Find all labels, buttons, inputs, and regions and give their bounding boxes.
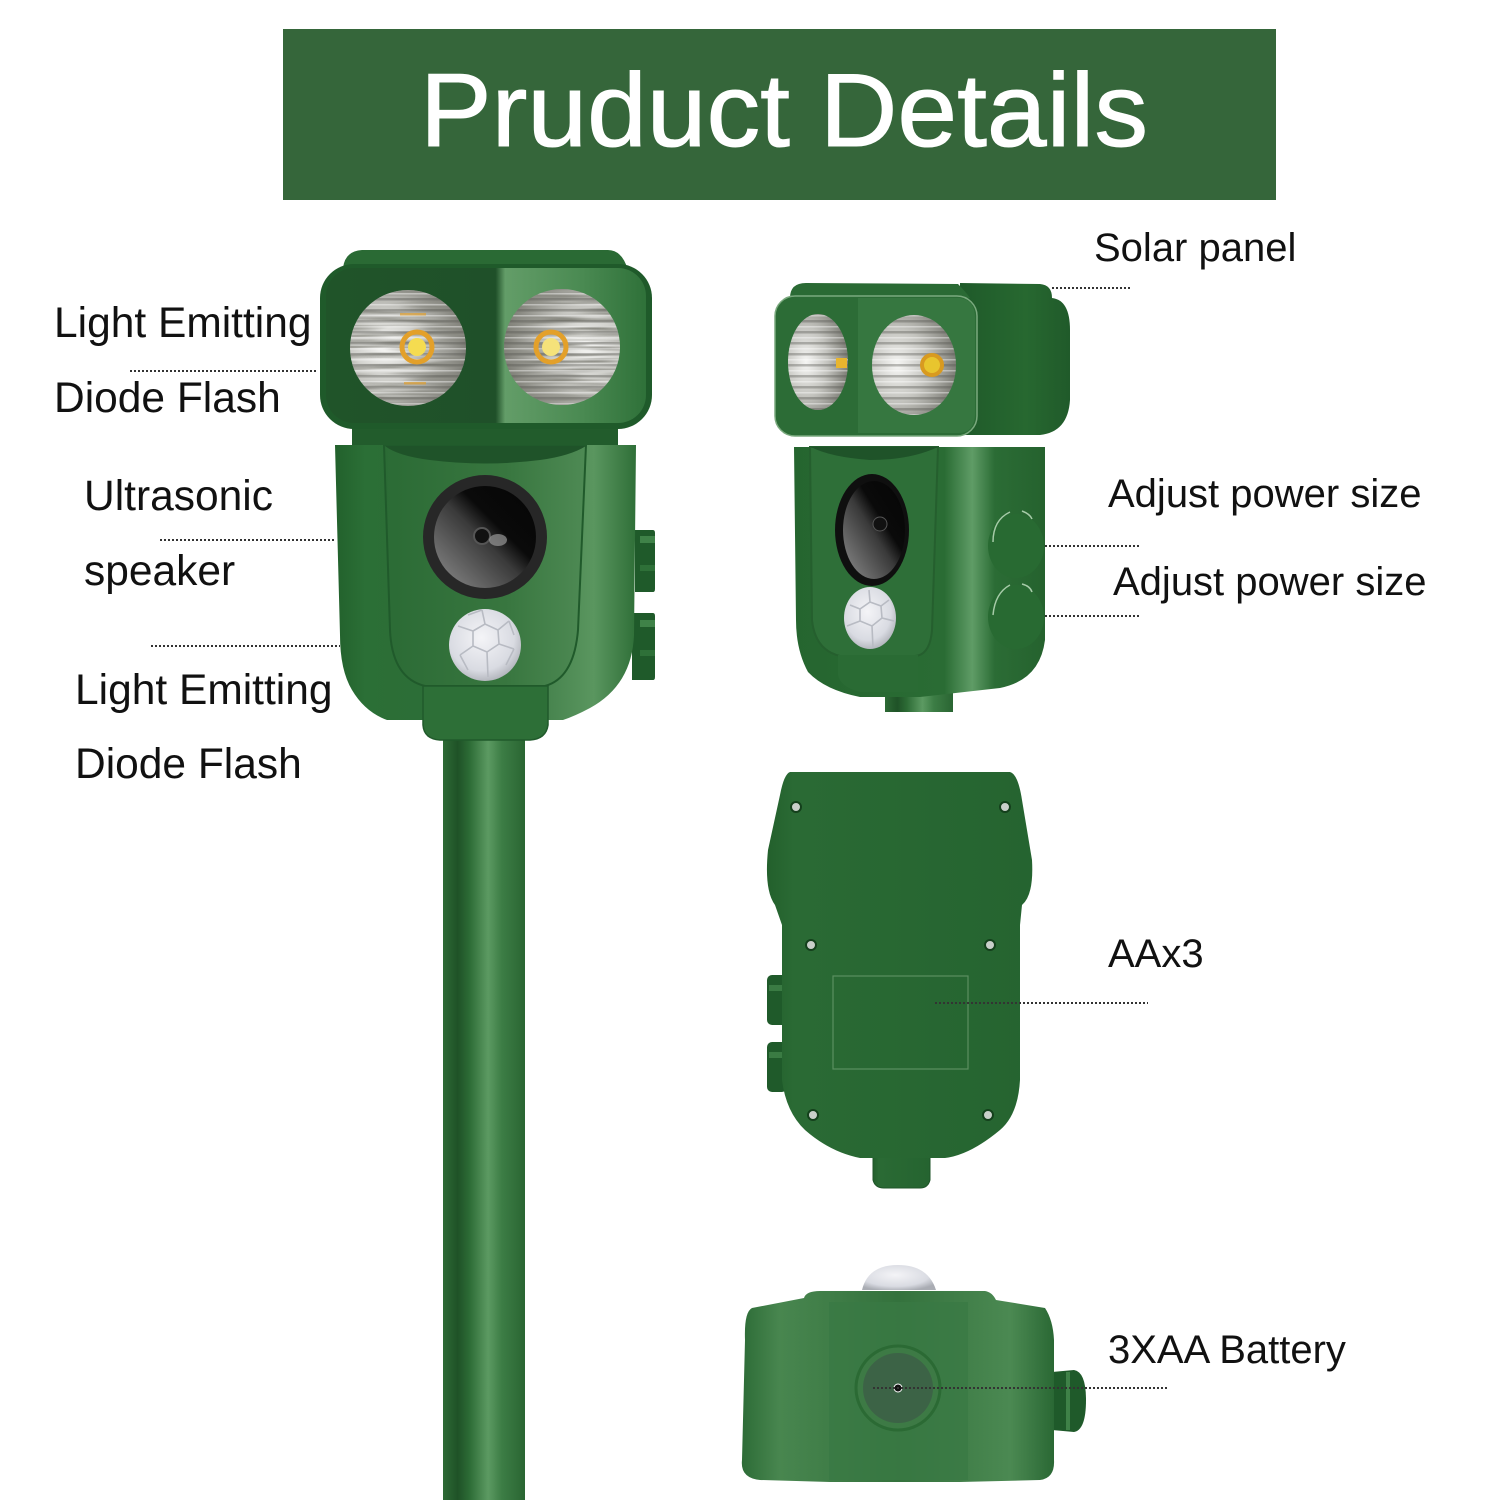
angled lens right (872, 315, 956, 415)
bottom center column (829, 1302, 968, 1480)
label: LED flash lower: Light Emitting (75, 667, 332, 714)
screws (791, 802, 1010, 1120)
angled knobs (988, 511, 1044, 649)
back housing (767, 772, 1032, 1158)
angled PIR sensor (844, 587, 896, 649)
label: LED flash top: Light Emitting (54, 300, 312, 347)
ultrasonic speaker (423, 475, 547, 599)
label: adjust power size 2: Adjust power size (1113, 560, 1426, 604)
hinge (352, 425, 618, 445)
LED lens left (350, 290, 466, 406)
label: ultrasonic speaker: speaker (84, 548, 235, 595)
PIR motion sensor (449, 609, 521, 681)
angled head side (960, 283, 1070, 435)
angled tab (838, 655, 918, 692)
title: Pruduct Details (420, 53, 1148, 169)
angled speaker (835, 474, 909, 586)
lamp head front (326, 268, 646, 423)
product: bottom view (742, 1265, 1086, 1482)
label: ultrasonic speaker (84, 473, 273, 595)
angled head front (775, 296, 977, 436)
label: 3XAA battery: 3XAA Battery (1108, 1328, 1346, 1372)
bottom housing (742, 1291, 1054, 1482)
battery cover outline (833, 976, 968, 1069)
angled front panel (810, 447, 938, 656)
title banner (283, 29, 1276, 200)
lamp head (320, 264, 652, 429)
product: angled view (775, 283, 1070, 712)
battery port (856, 1346, 940, 1430)
back stub (873, 1150, 930, 1188)
label: adjust power size 1: Adjust power size (1108, 472, 1421, 516)
leader lines (130, 288, 1167, 1388)
angled cap (790, 283, 970, 298)
label: LED flash lower (75, 667, 332, 788)
bottom knob (1052, 1370, 1086, 1432)
label: solar panel: Solar panel (1094, 226, 1296, 270)
angled body (794, 447, 1045, 697)
stake pole (443, 730, 525, 1500)
bottom tab (423, 686, 548, 740)
label: LED flash top (54, 300, 312, 422)
label: ultrasonic speaker: Ultrasonic (84, 473, 273, 520)
head top cap (343, 250, 628, 270)
mounting post (885, 690, 953, 712)
label: LED flash lower: Diode Flash (75, 741, 302, 788)
side knobs (632, 530, 655, 680)
product: back view (767, 772, 1032, 1188)
back knobs (767, 975, 787, 1092)
product: front view on stake (320, 250, 655, 1500)
LED lens right (504, 289, 620, 405)
label: AAx3: AAx3 (1108, 932, 1204, 976)
front recessed panel (384, 445, 586, 686)
angled lens left (788, 314, 848, 410)
bottom PIR dome (862, 1265, 936, 1290)
body housing (335, 445, 636, 720)
label: LED flash top: Diode Flash (54, 375, 281, 422)
